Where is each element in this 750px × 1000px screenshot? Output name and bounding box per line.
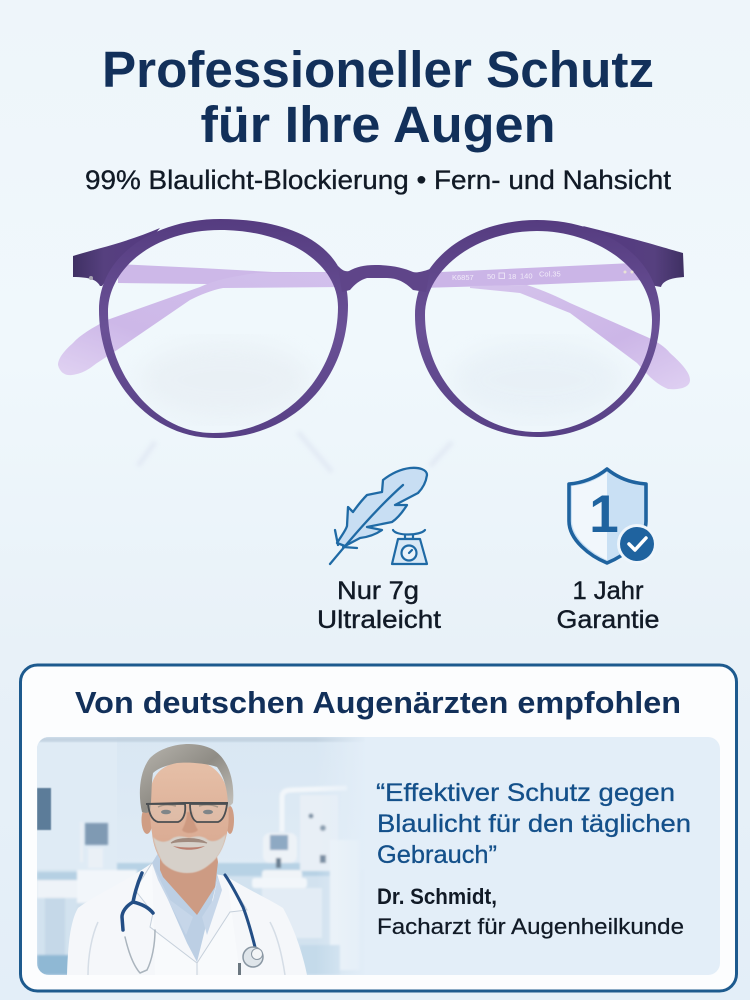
temple engraving	[452, 270, 561, 282]
attribution: Facharzt für Augenheilkunde	[377, 914, 684, 939]
feature: ultralight	[330, 468, 427, 564]
bridge	[338, 265, 430, 292]
glasses product image	[58, 219, 690, 472]
icon: shield: 1	[589, 485, 619, 544]
temple engraving: 50	[487, 272, 495, 281]
attribution	[377, 884, 684, 939]
attribution: Dr. Schmidt,	[377, 884, 497, 909]
eyes	[161, 810, 171, 814]
near temple left	[58, 272, 345, 375]
moustache and mouth	[171, 838, 207, 843]
label: 1 Jahr Garantie	[556, 577, 660, 634]
soft shadow marks under glasses	[138, 432, 452, 472]
clinic background	[37, 737, 365, 975]
right end piece	[583, 226, 684, 287]
quote: Blaulicht für den täglichen	[377, 810, 691, 838]
title	[102, 41, 654, 153]
quote: Gebrauch”	[377, 841, 497, 869]
right rim	[415, 220, 660, 437]
label: Nur 7g Ultraleicht: Ultraleicht	[317, 606, 441, 634]
left rim	[99, 219, 348, 438]
icon: feather	[330, 468, 427, 564]
label: 1 Jahr Garantie: 1 Jahr	[572, 577, 644, 605]
neck and face	[140, 744, 234, 915]
subtitle: 99% Blaulicht-Blockierung • Fern- und Nahsicht	[85, 165, 672, 195]
face	[150, 762, 228, 858]
title: Professioneller Schutz	[102, 41, 654, 98]
hinge pins	[89, 276, 93, 280]
quote	[376, 779, 691, 869]
hair	[140, 744, 233, 813]
stethoscope	[122, 873, 263, 975]
title: für Ihre Augen	[200, 96, 556, 153]
panel: recommendation card	[20, 665, 736, 991]
temple engraving: 140	[520, 272, 533, 280]
left end piece	[73, 228, 160, 286]
feature: warranty	[569, 469, 657, 564]
temple engraving: Col.35	[539, 270, 561, 278]
label: 1 Jahr Garantie: Garantie	[556, 606, 660, 634]
coat	[67, 850, 307, 975]
card heading: Von deutschen Augenärzten empfohlen	[75, 685, 681, 720]
nose	[182, 812, 198, 833]
temple engraving: K6857	[452, 273, 474, 282]
label: Nur 7g Ultraleicht	[317, 577, 441, 634]
far temple right	[420, 263, 645, 288]
doctor photo	[37, 737, 368, 975]
lens haze	[140, 342, 310, 418]
icon: scale	[392, 530, 427, 564]
label: Nur 7g Ultraleicht: Nur 7g	[337, 577, 419, 605]
quote: “Effektiver Schutz gegen	[376, 779, 675, 807]
temple engraving: 18	[508, 272, 516, 281]
spectacles	[146, 803, 228, 804]
ears	[142, 812, 152, 834]
far temple left	[118, 264, 345, 287]
photo fade to panel	[321, 737, 366, 975]
beard	[153, 834, 226, 873]
inner panel	[37, 737, 720, 975]
near temple right	[470, 285, 690, 389]
